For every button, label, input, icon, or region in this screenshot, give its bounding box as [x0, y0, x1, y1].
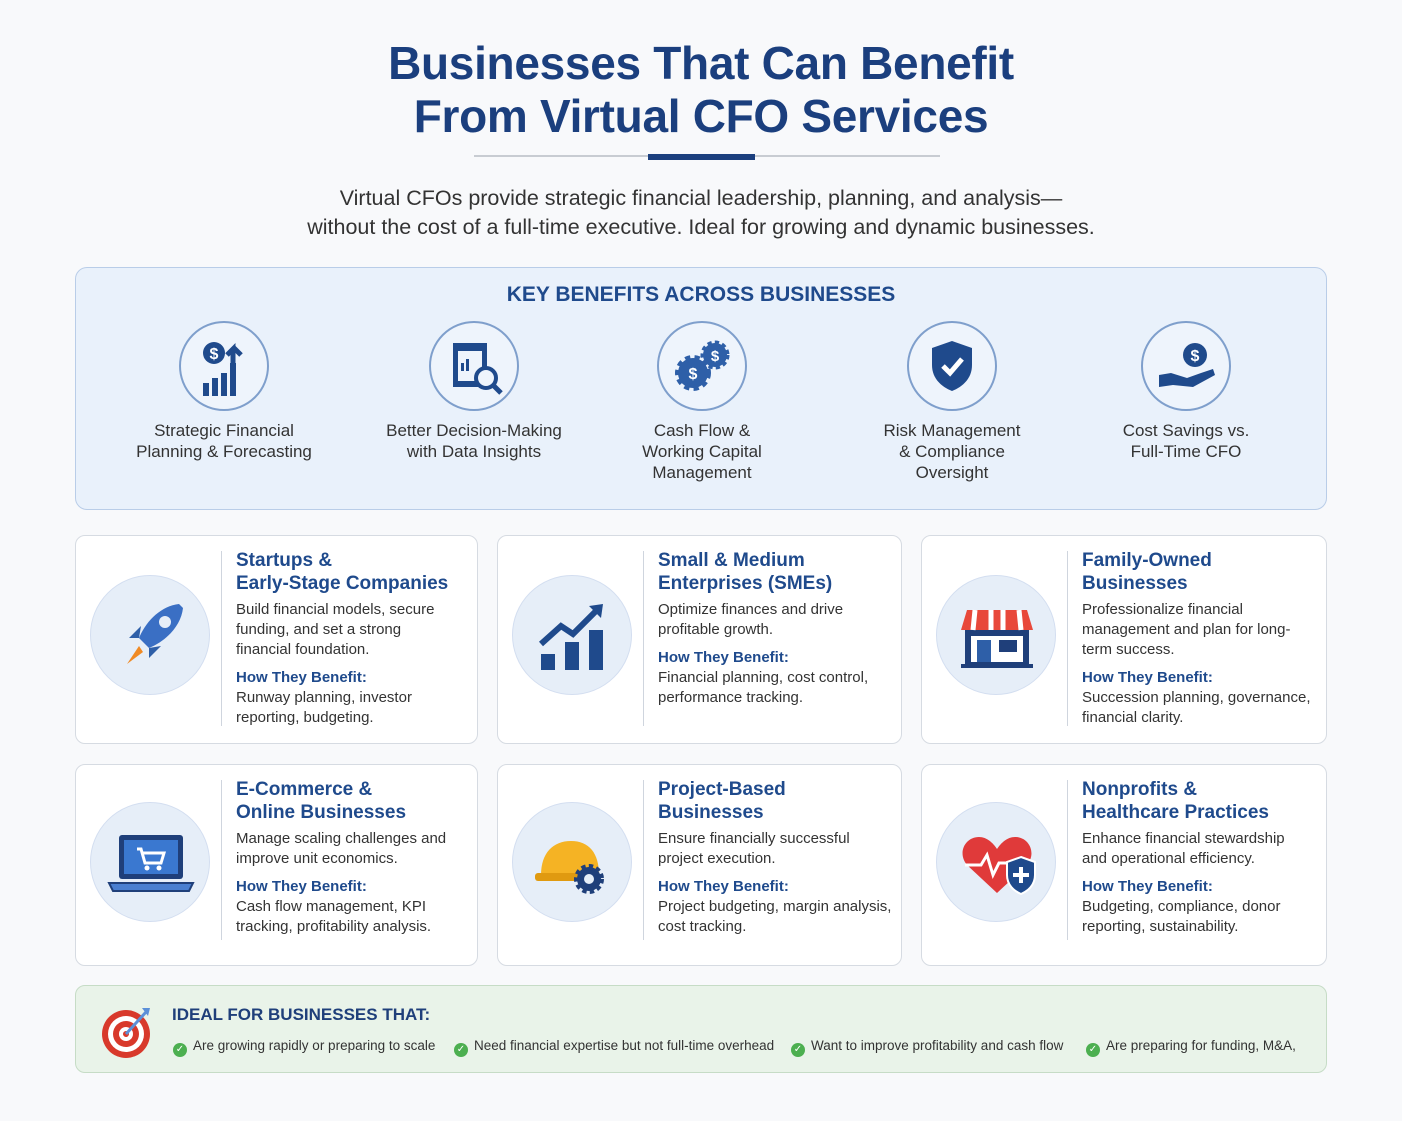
subtitle: Virtual CFOs provide strategic financial leadership, planning, and analysis—: [340, 186, 1062, 210]
benefit: cash flow: [642, 321, 762, 482]
panel: key benefits: [75, 267, 1327, 510]
benefit: risk management: Risk Management: [883, 421, 1020, 440]
divider: [474, 155, 940, 157]
text: SMEs: Enterprises (SMEs): [658, 573, 832, 594]
text: SMEs: Optimize finances and drive profitable growth.: [658, 601, 843, 638]
text: e-commerce: [236, 779, 446, 935]
benefit: cash flow: $: [711, 348, 720, 365]
panel: key benefits: Oversight: [916, 463, 988, 482]
benefit: cash flow: $: [689, 366, 698, 383]
benefit: risk management: [883, 321, 1020, 482]
text: family-owned: Professionalize financial management and plan for long-term success.: [1082, 601, 1290, 658]
text: startups: Runway planning, investor reporting, budgeting.: [236, 689, 412, 726]
text: family-owned: How They Benefit:: [1082, 669, 1213, 686]
benefit: cost savings: [1123, 321, 1249, 461]
text: project-based: Ensure financially successful project execution.: [658, 830, 850, 867]
benefit: cost savings: Full-Time CFO: [1131, 442, 1241, 461]
text: e-commerce: Manage scaling challenges and improve unit economics.: [236, 830, 446, 867]
text: nonprofits: Budgeting, compliance, donor reporting, sustainability.: [1082, 898, 1280, 935]
card: project-based: [497, 764, 902, 966]
panel: ideal for: ✓: [1089, 1044, 1097, 1055]
text: nonprofits: Healthcare Practices: [1082, 802, 1269, 823]
icon: rocket: [90, 575, 210, 695]
panel: ideal for: ✓: [794, 1044, 802, 1055]
icon: growth chart: [512, 575, 632, 695]
card: SMEs: [497, 535, 902, 744]
text: nonprofits: How They Benefit:: [1082, 878, 1213, 895]
text: family-owned: [1082, 550, 1310, 726]
benefit: strategic planning: $: [210, 346, 219, 363]
title: [388, 37, 1014, 142]
panel: ideal for: Want to improve profitability and cash flow: [811, 1038, 1063, 1053]
text: startups: How They Benefit:: [236, 669, 367, 686]
text: SMEs: Financial planning, cost control, performance tracking.: [658, 669, 868, 706]
text: SMEs: How They Benefit:: [658, 649, 789, 666]
text: nonprofits: Enhance financial stewardship and operational efficiency.: [1082, 830, 1285, 867]
icon: heart shield: [936, 802, 1056, 922]
text: e-commerce: Online Businesses: [236, 802, 406, 823]
text: startups: Startups &: [236, 550, 332, 571]
icon: storefront: [936, 575, 1056, 695]
benefit: cash flow: Cash Flow &: [654, 421, 750, 440]
benefit: cost savings: $: [1191, 348, 1200, 365]
list items: Are growing rapidly or preparing to scale: [193, 1038, 435, 1053]
text: family-owned: Succession planning, governance, financial clarity.: [1082, 689, 1310, 726]
text: startups: [236, 550, 448, 726]
icon: hard hat gear: [512, 802, 632, 922]
card: nonprofits: [921, 764, 1327, 966]
benefit: strategic planning: [136, 321, 312, 461]
title: From Virtual CFO Services: [414, 90, 988, 142]
card: startups: [75, 535, 478, 744]
text: startups: Early-Stage Companies: [236, 573, 448, 594]
text: startups: Build financial models, secure funding, and set a strong financial foundation.: [236, 601, 434, 658]
text: project-based: Project-Based: [658, 779, 786, 800]
panel: key benefits: Management: [652, 463, 752, 482]
text: family-owned: Family-Owned: [1082, 550, 1212, 571]
panel: ideal for: ✓: [457, 1044, 465, 1055]
benefit: decision making: Better Decision-Making: [386, 421, 562, 440]
benefit: decision making: with Data Insights: [407, 442, 541, 461]
benefit: strategic planning: Strategic Financial: [154, 421, 294, 440]
benefit: decision making: [386, 321, 562, 461]
benefit: strategic planning: Planning & Forecasting: [136, 442, 312, 461]
text: e-commerce: E-Commerce &: [236, 779, 372, 800]
text: project-based: Businesses: [658, 802, 764, 823]
title: Businesses That Can Benefit: [388, 37, 1014, 89]
benefit: risk management: & Compliance: [899, 442, 1005, 461]
text: SMEs: Small & Medium: [658, 550, 805, 571]
text: e-commerce: Cash flow management, KPI tracking, profitability analysis.: [236, 898, 431, 935]
icon: target: [102, 1008, 150, 1058]
list items: ✓: [176, 1044, 184, 1055]
panel: ideal for: Need financial expertise but not full-time overhead: [474, 1038, 774, 1053]
benefit: cost savings: Cost Savings vs.: [1123, 421, 1249, 440]
heading: ideal for: IDEAL FOR BUSINESSES THAT:: [172, 1005, 430, 1024]
card: e-commerce: [75, 764, 478, 966]
heading: key benefits: KEY BENEFITS ACROSS BUSINESSES: [507, 283, 895, 306]
benefit: cash flow: Working Capital: [642, 442, 762, 461]
text: nonprofits: Nonprofits &: [1082, 779, 1197, 800]
text: project-based: Project budgeting, margin analysis, cost tracking.: [658, 898, 891, 935]
text: SMEs: [658, 550, 868, 706]
subtitle: [307, 186, 1095, 239]
card: family-owned: [921, 535, 1327, 744]
text: project-based: [658, 779, 891, 935]
subtitle: without the cost of a full-time executive. Ideal for growing and dynamic businesses.: [307, 215, 1095, 239]
text: family-owned: Businesses: [1082, 573, 1188, 594]
panel: ideal for: [75, 985, 1327, 1073]
text: e-commerce: How They Benefit:: [236, 878, 367, 895]
text: project-based: How They Benefit:: [658, 878, 789, 895]
icon: laptop cart: [90, 802, 210, 922]
text: nonprofits: [1082, 779, 1285, 935]
